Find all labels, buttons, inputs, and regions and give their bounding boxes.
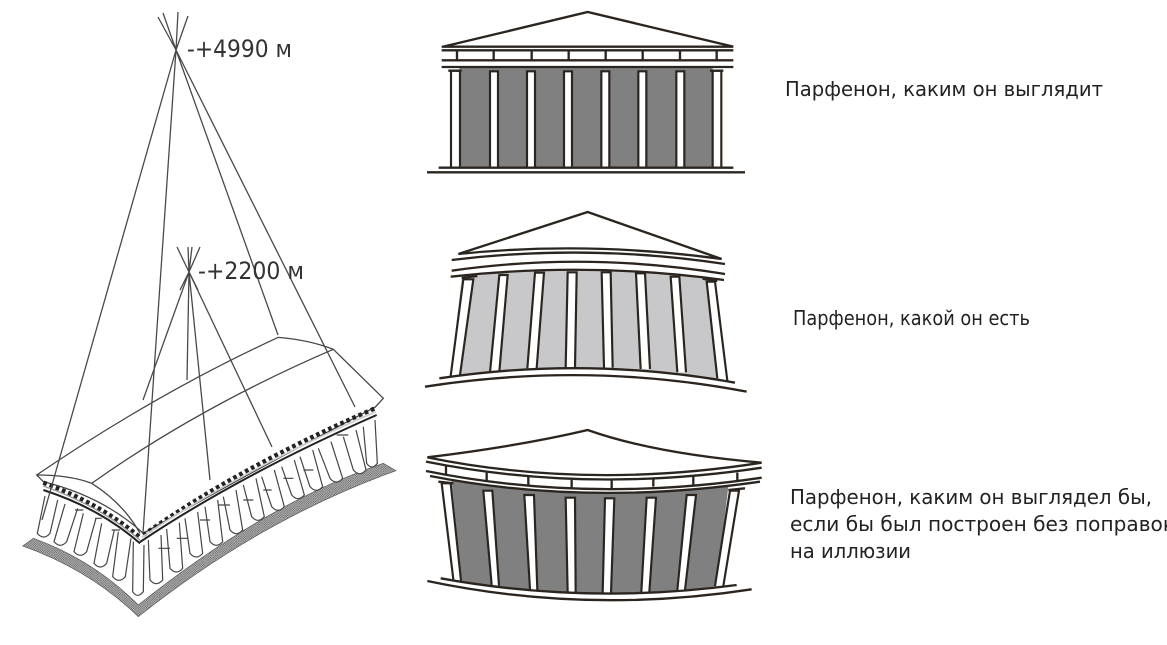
frieze triglyphs <box>457 50 717 60</box>
columns <box>451 71 721 167</box>
columns <box>451 272 727 381</box>
columns <box>442 483 739 593</box>
caption: without corrections <box>790 485 1167 563</box>
diagram: Parthenon perspective with convergence points <box>23 12 396 617</box>
columns field <box>451 270 727 380</box>
elevation: Parthenon as it is <box>425 212 747 392</box>
column cross bars <box>75 435 348 548</box>
stylobate <box>425 368 747 392</box>
caption: without corrections: Парфенон, каким он выглядел бы, <box>790 485 1152 509</box>
label: 2200 m: -+2200 м <box>198 257 304 285</box>
elevation: Parthenon without optical corrections <box>426 430 762 600</box>
capitals <box>448 67 723 74</box>
sight lines to the 4990 m convergence point <box>42 12 355 533</box>
columns field <box>452 481 728 595</box>
building in perspective <box>23 337 396 617</box>
stylobate <box>427 578 752 600</box>
stylobate <box>23 463 396 617</box>
frieze triglyphs <box>446 466 737 489</box>
colonnade <box>37 420 377 595</box>
sight lines to the 2200 m convergence point <box>143 247 272 480</box>
caption: as it is: Парфенон, какой он есть <box>793 306 1030 330</box>
caption: as it appears: Парфенон, каким он выглядит <box>785 77 1103 101</box>
elevation: Parthenon as it appears <box>427 12 745 172</box>
pediment <box>442 12 733 67</box>
caption: without corrections: на иллюзии <box>790 539 911 563</box>
pediment <box>451 212 725 280</box>
columns field <box>459 68 713 167</box>
stylobate <box>427 168 745 172</box>
capitals <box>462 276 717 281</box>
capitals <box>438 482 745 490</box>
label: 4990 m: -+4990 м <box>187 35 292 63</box>
entablature <box>43 408 377 543</box>
roof <box>37 337 383 533</box>
pediment <box>426 430 762 493</box>
